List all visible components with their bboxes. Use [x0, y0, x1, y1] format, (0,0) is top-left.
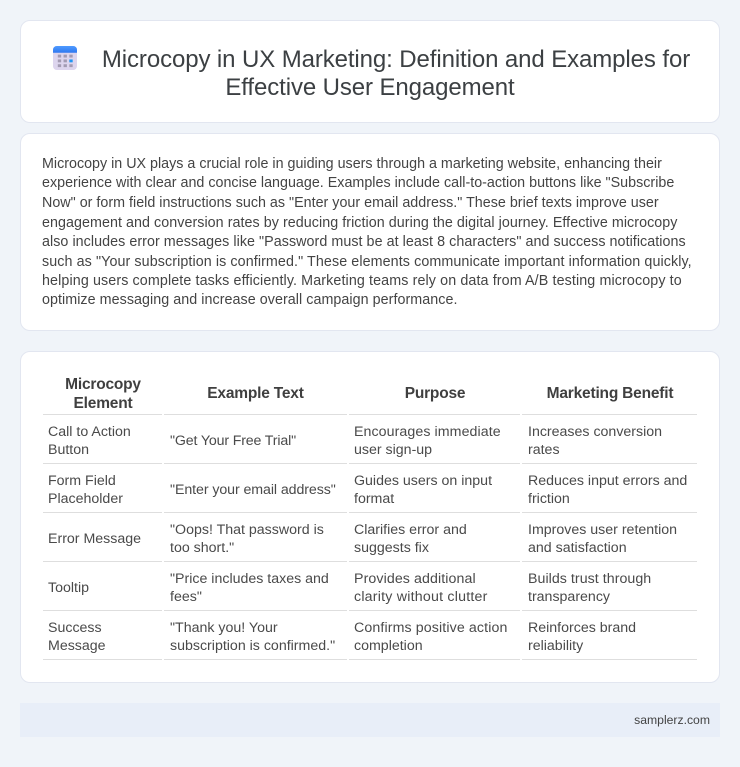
icon: calendar — [53, 46, 77, 70]
row: call to action button: Call to Action — [48, 424, 131, 440]
footer text: samplerz.com — [634, 713, 710, 727]
header card — [20, 20, 720, 123]
row: call to action button: rates — [528, 442, 560, 458]
row: success message: Reinforces brand — [528, 620, 636, 636]
row: call to action button: Encourages immediate — [354, 424, 501, 440]
table header — [65, 376, 674, 412]
row: success message: Success — [48, 620, 102, 636]
intro paragraph: Microcopy in UX plays a crucial role in guiding users through a marketing website, enhancing their — [42, 156, 662, 172]
table header: Purpose — [405, 385, 465, 402]
intro paragraph: such as "Your subscription is confirmed." These elements communicate important information quickly, — [42, 254, 692, 270]
row: error message: Improves user retention — [528, 522, 677, 538]
row: success message — [48, 620, 636, 654]
row: form field placeholder: Form Field — [48, 473, 116, 489]
row: call to action button: "Get Your Free Trial" — [170, 433, 296, 449]
title: Microcopy in UX Marketing: Definition and Examples for — [102, 46, 690, 73]
row: success message: reliability — [528, 638, 583, 654]
row: tooltip — [48, 571, 651, 605]
row: call to action button: user sign-up — [354, 442, 432, 458]
intro paragraph: helping users complete tasks efficiently. Marketing teams rely on data from A/B testing microcopy to — [42, 273, 682, 289]
row: tooltip: Tooltip — [48, 580, 89, 596]
row: error message: Error Message — [48, 531, 141, 547]
table header: Microcopy — [65, 376, 141, 393]
intro paragraph: experience with clear and concise language. Examples include call-to-action buttons like "Subscribe — [42, 175, 674, 191]
row: tooltip: Builds trust through — [528, 571, 651, 587]
intro paragraph — [42, 156, 692, 308]
row: form field placeholder: "Enter your email address" — [170, 482, 336, 498]
row: success message: Message — [48, 638, 106, 654]
intro paragraph: Now" or form field instructions such as "Enter your email address." These brief texts improve user — [42, 195, 659, 211]
row: success message: subscription is confirmed." — [170, 638, 335, 654]
intro paragraph: also includes error messages like "Password must be at least 8 characters" and success notifications — [42, 234, 686, 250]
panel: intro text — [20, 133, 720, 331]
row: form field placeholder: Placeholder — [48, 491, 123, 507]
row: tooltip: clarity without clutter — [354, 589, 488, 605]
row: error message: Clarifies error and — [354, 522, 467, 538]
title: Effective User Engagement — [225, 74, 515, 101]
row: tooltip: fees" — [170, 589, 202, 605]
table header: Example Text — [207, 385, 304, 402]
row: form field placeholder: Guides users on input — [354, 473, 492, 489]
row: call to action button: Increases conversion — [528, 424, 662, 440]
row: tooltip: "Price includes taxes and — [170, 571, 329, 587]
row: form field placeholder: format — [354, 491, 394, 507]
row: call to action button — [48, 424, 662, 458]
row: error message: suggests fix — [354, 540, 429, 556]
row: error message — [48, 522, 677, 556]
table header: Element — [74, 394, 132, 412]
panel: table — [20, 351, 720, 683]
row: error message: too short." — [170, 540, 234, 556]
row: error message: "Oops! That password is — [170, 522, 324, 538]
intro paragraph: optimize messaging and increase overall campaign performance. — [42, 292, 458, 308]
row: form field placeholder — [48, 473, 687, 507]
row: form field placeholder: friction — [528, 491, 570, 507]
row: tooltip: Provides additional — [354, 571, 476, 587]
table header: Marketing Benefit — [547, 385, 673, 402]
row: form field placeholder: Reduces input errors and — [528, 473, 687, 489]
footer bar — [20, 703, 720, 737]
title — [102, 46, 690, 101]
row: success message: Confirms positive action — [354, 620, 507, 636]
row: success message: completion — [354, 638, 423, 654]
row: error message: and satisfaction — [528, 540, 627, 556]
intro paragraph: engagement and conversion rates by reducing friction during the digital journey. Effective microcopy — [42, 215, 677, 231]
row: tooltip: transparency — [528, 589, 610, 605]
row: call to action button: Button — [48, 442, 89, 458]
row: success message: "Thank you! Your — [170, 620, 278, 636]
